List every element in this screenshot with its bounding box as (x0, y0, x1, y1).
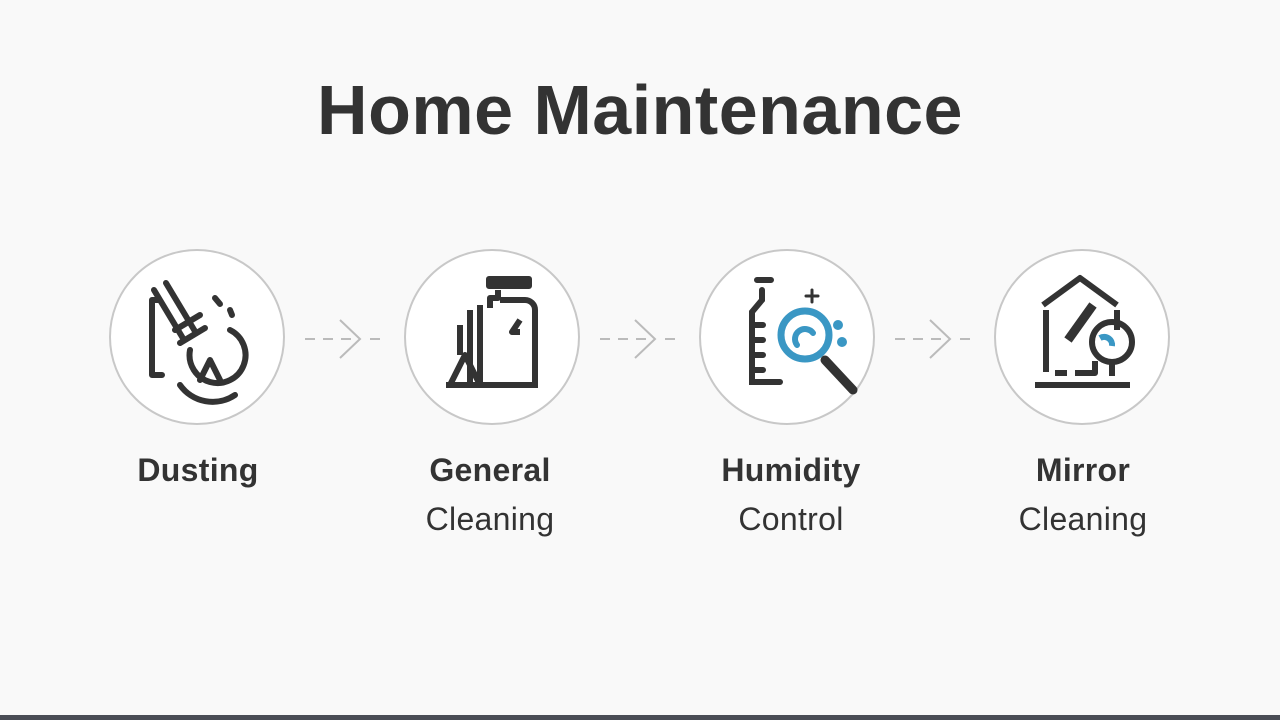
label: general cleaning: General (429, 452, 551, 488)
label: general cleaning: Cleaning (426, 501, 554, 537)
label: mirror cleaning: Cleaning (1019, 501, 1147, 537)
arrow 3 (895, 320, 975, 358)
step 1 icon: dusting (110, 250, 284, 424)
step 3 icon: humidity control (700, 250, 874, 424)
step 2 icon: general cleaning (405, 250, 579, 424)
step 4 icon: mirror cleaning (995, 250, 1169, 424)
label: humidity control: Humidity (721, 452, 861, 488)
label: humidity control: Control (738, 501, 844, 537)
label: general cleaning (426, 452, 554, 537)
label: humidity control (721, 452, 861, 537)
label: dusting: Dusting (137, 452, 259, 488)
label: mirror cleaning (1019, 452, 1147, 537)
label: mirror cleaning: Mirror (1036, 452, 1130, 488)
arrow 2 (600, 320, 680, 358)
title: Home Maintenance (317, 71, 963, 149)
arrow 1 (305, 320, 385, 358)
